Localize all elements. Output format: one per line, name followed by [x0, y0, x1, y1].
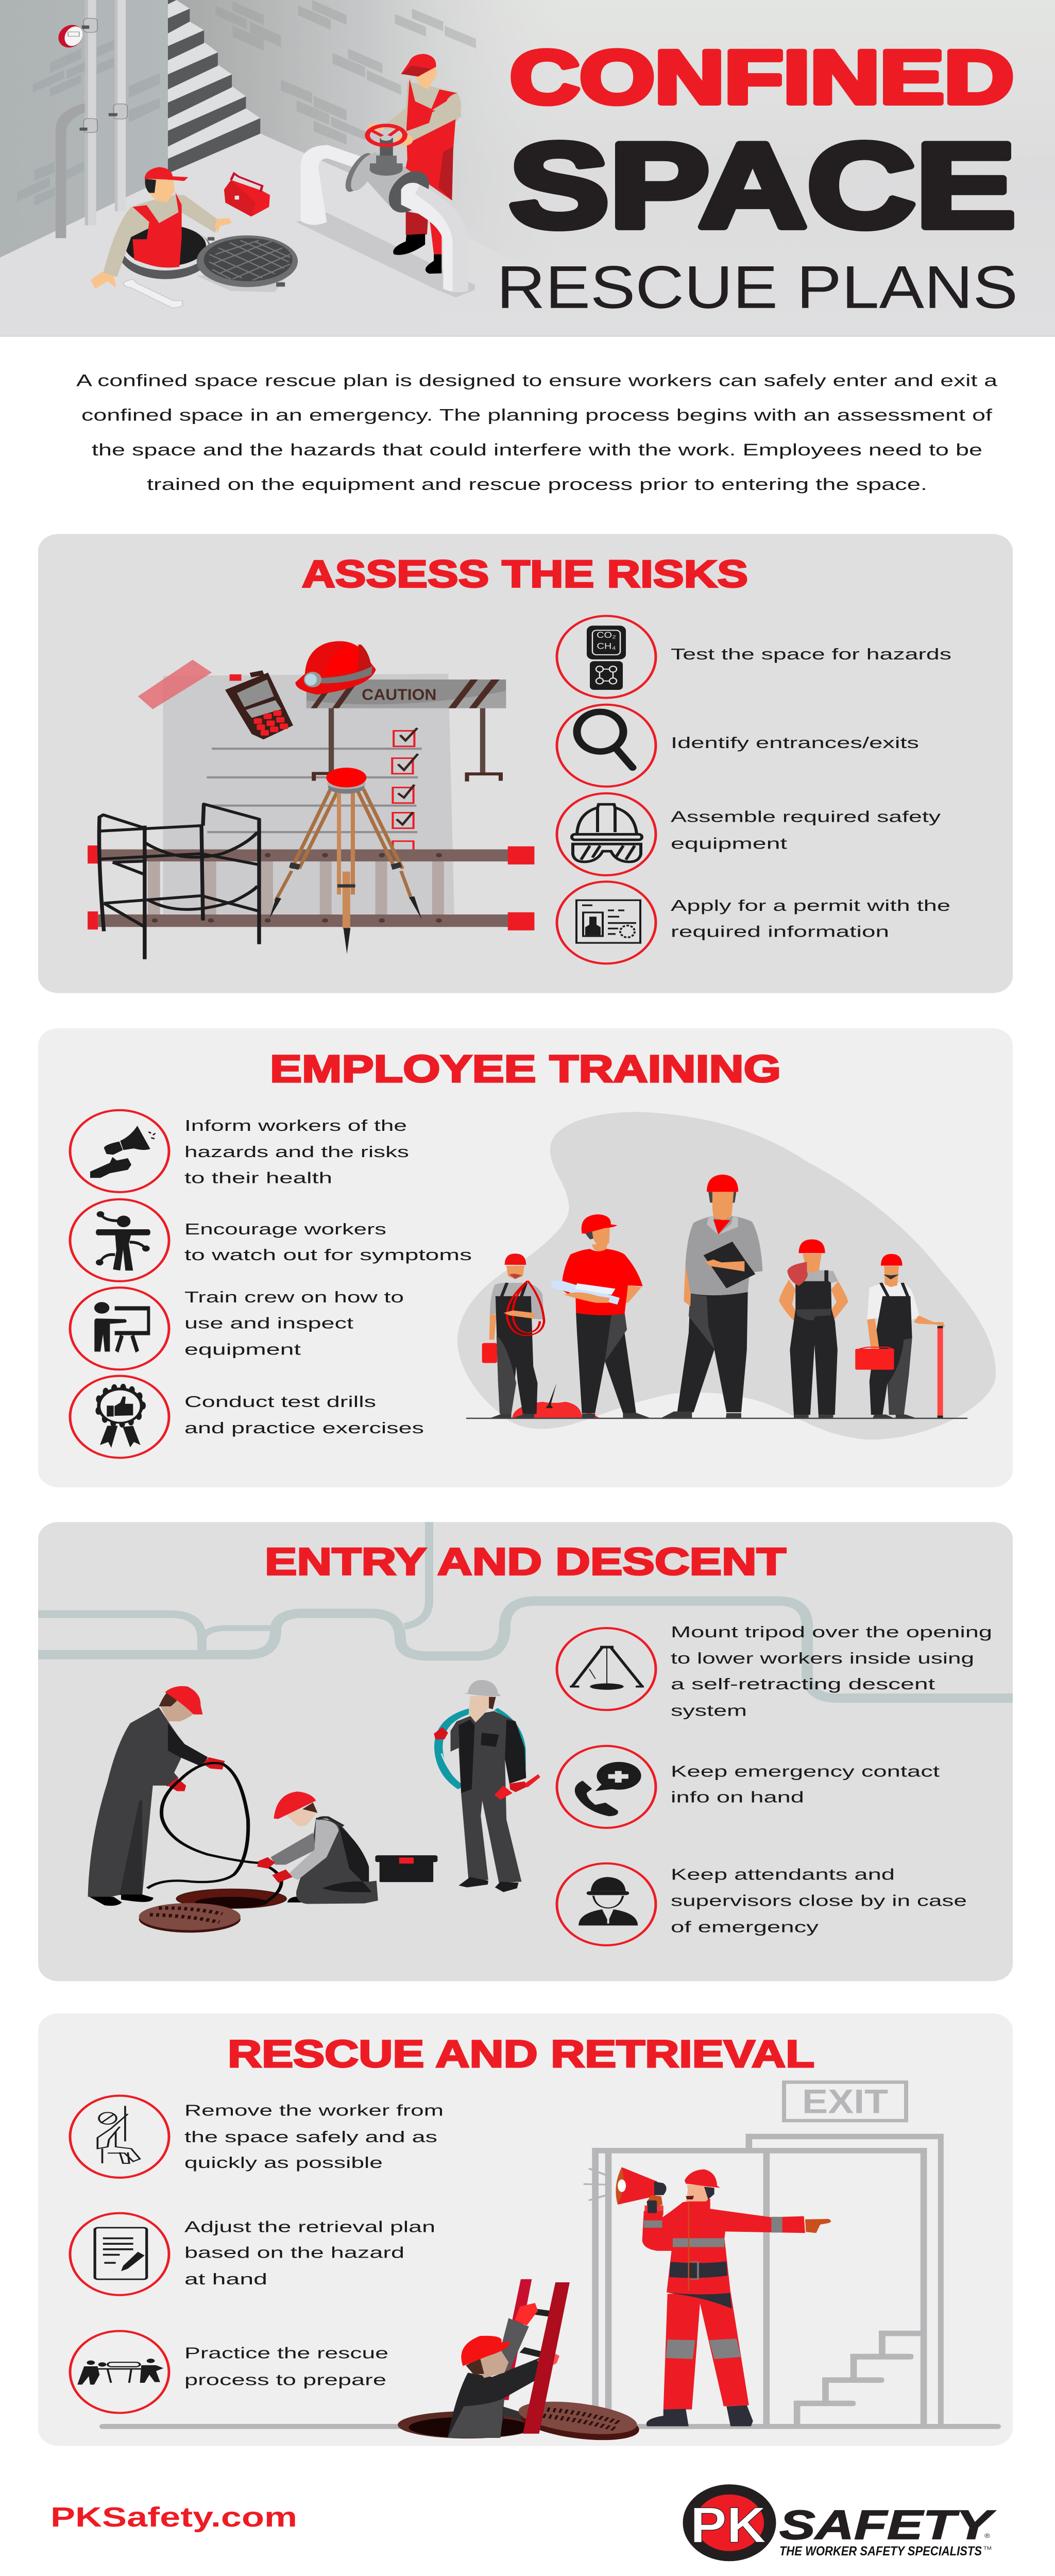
- intro text: [76, 371, 997, 494]
- sewer cover: [139, 1903, 241, 1933]
- icon: gas detector: CO₂: [597, 630, 616, 640]
- intro text: the space and the hazards that could interfere with the work. Employees need to be: [92, 440, 982, 459]
- banner illustration: workers in confined space: [0, 0, 489, 336]
- item: mount tripod: [557, 1623, 992, 1720]
- item: inform workers: hazards and the risks: [184, 1143, 409, 1161]
- worker 5: [855, 1254, 945, 1418]
- item: inform workers: to their health: [184, 1170, 332, 1187]
- caution barrier: [307, 680, 506, 782]
- item: symptoms: to watch out for symptoms: [184, 1246, 472, 1264]
- text: Practice the rescue: [184, 2345, 388, 2362]
- item: identify exits: [557, 705, 919, 787]
- intro text: A confined space rescue plan is designed to ensure workers can safely enter and exit a: [76, 371, 997, 390]
- icon: gas detector: CH₄: [597, 641, 616, 651]
- logo: PK Safety: ®: [984, 2532, 990, 2539]
- text: Test the space for hazards: [671, 646, 951, 663]
- open manhole: [176, 1889, 286, 1908]
- item: permit: [557, 882, 950, 963]
- item: practice rescue: [70, 2331, 388, 2413]
- item: safety equipment: equipment: [671, 835, 788, 852]
- worker climbing ladder: [448, 2279, 559, 2438]
- icon: document and pencil: [95, 2228, 147, 2279]
- item: adjust plan: [70, 2213, 435, 2295]
- heading: assess the risks: ASSESS THE RISKS: [302, 552, 748, 596]
- item: remove the worker: the space safely and as: [184, 2128, 437, 2146]
- manhole cover: [197, 235, 298, 287]
- text: Remove the worker from: [184, 2102, 444, 2119]
- white pipe elbow: [381, 167, 468, 292]
- exit sign: EXIT: [802, 2082, 888, 2121]
- item: mount tripod: to lower workers inside using: [671, 1650, 974, 1667]
- title: RESCUE PLANS: RESCUE PLANS: [497, 253, 1018, 321]
- worker 4: [779, 1240, 848, 1418]
- item: attendants close by: of emergency: [671, 1919, 819, 1936]
- item: adjust plan: at hand: [184, 2270, 267, 2288]
- item: test drills: [70, 1376, 424, 1458]
- panel: assess the risks: [38, 534, 1013, 993]
- logo: PK Safety: PK: [690, 2497, 766, 2553]
- icon: megaphone and hand: [90, 1126, 156, 1178]
- mining helmet: [296, 641, 376, 694]
- worker 3: [661, 1175, 762, 1418]
- item: emergency contact: info on hand: [671, 1789, 804, 1806]
- header banner: [0, 0, 1055, 336]
- text: Conduct test drills: [184, 1393, 376, 1411]
- icon: award ribbon with thumbs up: [97, 1387, 143, 1448]
- worker in manhole: [91, 167, 232, 289]
- heading: rescue and retrieval: RESCUE AND RETRIEVAL: [228, 2032, 814, 2075]
- item: adjust plan: based on the hazard: [184, 2244, 404, 2262]
- heading: entry and descent: ENTRY AND DESCENT: [265, 1540, 786, 1583]
- text: Keep attendants and: [671, 1866, 895, 1884]
- item: remove the worker: [70, 2096, 444, 2178]
- worker 2: [551, 1214, 651, 1418]
- text: Assemble required safety: [671, 808, 941, 826]
- worker 1: [482, 1253, 544, 1418]
- background blob: [457, 1112, 996, 1439]
- icon: permit document: [576, 900, 640, 943]
- title: SPACE: SPACE: [509, 118, 1016, 253]
- item: mount tripod: a self-retracting descent: [671, 1675, 935, 1693]
- gas radio: [225, 670, 293, 739]
- title: CONFINED: CONFINED: [510, 36, 1014, 119]
- item: attendants close by: supervisors close by in case: [671, 1892, 967, 1910]
- intro text: trained on the equipment and rescue process prior to entering the space.: [147, 475, 927, 494]
- panel: employee training: [38, 1028, 1013, 1487]
- text: Apply for a permit with the: [671, 897, 950, 914]
- icon: trainer at board: [94, 1302, 148, 1352]
- item: train crew: [70, 1287, 404, 1369]
- text: Adjust the retrieval plan: [184, 2218, 435, 2236]
- illustration: five workers: [482, 1175, 945, 1418]
- item: train crew: use and inspect: [184, 1315, 354, 1332]
- standing worker with hose and wrench: [434, 1680, 540, 1892]
- icon: magnifier: [577, 712, 633, 768]
- intro text: confined space in an emergency. The planning process begins with an assessment of: [81, 406, 992, 425]
- manhole cover: [512, 2396, 646, 2446]
- illustration: rescue scene: [398, 2134, 944, 2446]
- floor line: [99, 2424, 1001, 2429]
- text: Train crew on how to: [184, 1289, 404, 1306]
- item: test drills: and practice exercises: [184, 1419, 424, 1437]
- text: Encourage workers: [184, 1221, 386, 1238]
- text: Mount tripod over the opening: [671, 1623, 992, 1641]
- icon: helmet and goggles: [572, 804, 642, 862]
- item: attendants close by: [557, 1863, 967, 1945]
- caution barrier: CAUTION: [362, 686, 436, 703]
- item: safety equipment: [557, 793, 941, 875]
- text: Identify entrances/exits: [671, 734, 919, 752]
- manhole opening: [118, 225, 212, 279]
- item: symptoms: [70, 1199, 472, 1281]
- tool box: [375, 1855, 437, 1882]
- logo: PK Safety: [683, 2484, 996, 2561]
- text: Inform workers of the: [184, 1117, 407, 1134]
- item: permit: required information: [671, 923, 889, 941]
- item: mount tripod: system: [671, 1702, 747, 1720]
- hose: [147, 1763, 281, 1904]
- text: Keep emergency contact: [671, 1763, 940, 1781]
- manhole: [398, 2411, 538, 2438]
- icon: stretcher team: [77, 2359, 163, 2385]
- panel: entry and descent: [38, 1522, 1013, 1981]
- item: test for hazards: [557, 616, 951, 698]
- ground line: [466, 1418, 967, 1419]
- kneeling worker: [257, 1791, 378, 1904]
- icon: gas detector: [587, 625, 626, 690]
- surveying tripod: [269, 768, 422, 954]
- item: practice rescue: process to prepare: [184, 2371, 386, 2389]
- valve wheel: [367, 125, 405, 176]
- icon: person with symptoms: [96, 1211, 150, 1270]
- worker with hose: [88, 1686, 225, 1906]
- illustration: workers lowering hose: [88, 1680, 540, 1933]
- ladder: [88, 845, 534, 930]
- icon: supervisor with helmet: [578, 1877, 638, 1925]
- illustration: checklist, helmet, radio, barrier, tripod, scaffold: [88, 641, 534, 959]
- icon: phone with medical bubble: [575, 1762, 641, 1816]
- pipe and valve: [300, 145, 418, 225]
- scaffold: [99, 804, 259, 959]
- background pipes: [38, 1522, 1013, 1698]
- firefighter with megaphone: [616, 2167, 831, 2426]
- footer url: PKSafety.com: [50, 2501, 297, 2533]
- icon: red toolbox: [224, 174, 270, 216]
- icon: wall gas meter: [56, 23, 86, 49]
- logo: PK Safety: TM: [983, 2546, 992, 2551]
- checkboxes: [392, 731, 414, 850]
- door frame and stairs: [584, 2134, 944, 2426]
- ladder front rail: [523, 2282, 570, 2434]
- floor helmet: [512, 1383, 600, 1418]
- logo: PK Safety: SAFETY: [779, 2502, 996, 2548]
- icon: tripod: [570, 1646, 644, 1690]
- item: remove the worker: quickly as possible: [184, 2154, 383, 2172]
- item: emergency contact: [557, 1746, 940, 1828]
- item: inform workers: [70, 1110, 409, 1192]
- icon: wrench: [123, 279, 182, 308]
- valve worker: [367, 54, 462, 274]
- logo: PK Safety: THE WORKER SAFETY SPECIALISTS: [779, 2544, 982, 2558]
- item: train crew: equipment: [184, 1341, 301, 1359]
- heading: employee training: EMPLOYEE TRAINING: [270, 1047, 781, 1090]
- panel: rescue and retrieval: [38, 2013, 1013, 2446]
- icon: climber on rope: [97, 2106, 140, 2163]
